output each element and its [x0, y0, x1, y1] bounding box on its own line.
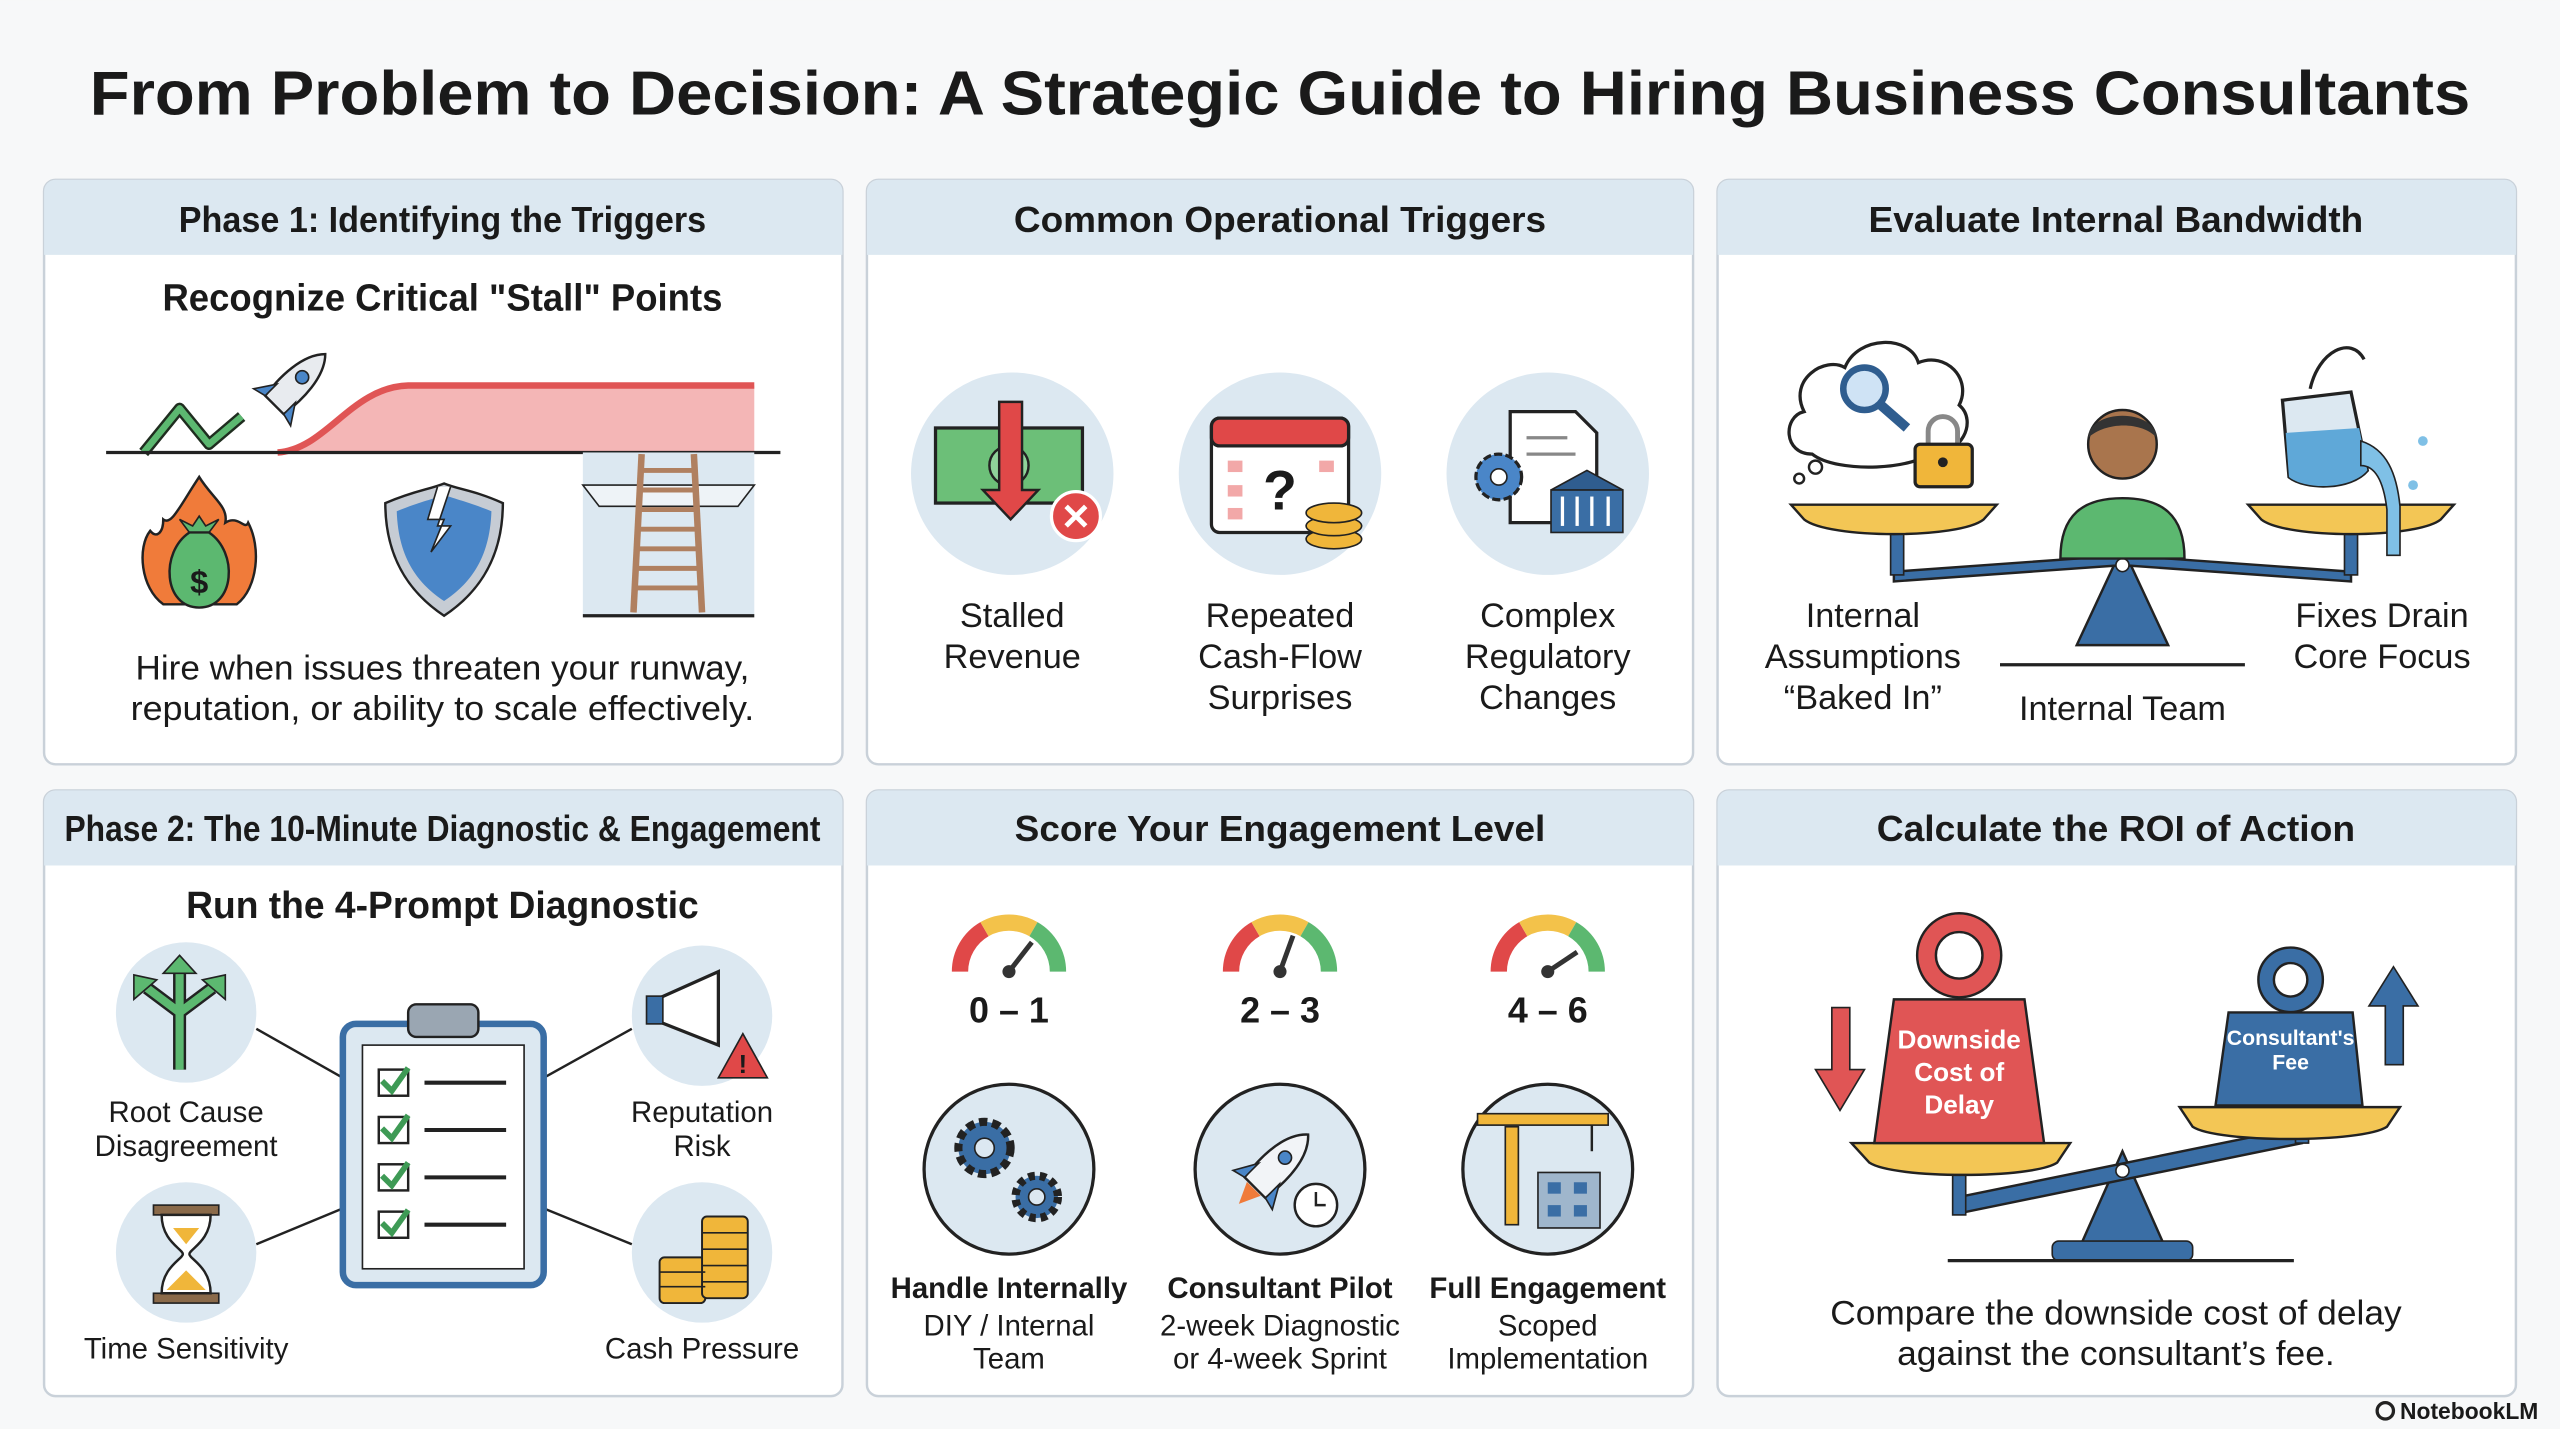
icon: cracked shield — [385, 483, 503, 616]
icon: burning money bag — [143, 477, 256, 608]
icon: draining pitcher — [2282, 348, 2428, 555]
text: compare — [1830, 1294, 2403, 1373]
icon: gears — [924, 1084, 1094, 1254]
panel: internal bandwidth — [1718, 180, 2516, 764]
icon: burning money bag: $ — [190, 563, 208, 600]
icon: blue weight consultant fee: Consultant's — [2227, 1027, 2354, 1050]
icon: thought cloud with magnifier and lock — [1789, 342, 1972, 487]
label: cash-flow surprises: Repeated — [1206, 597, 1354, 635]
text: hire when — [131, 649, 754, 728]
label: handle internally: Team — [973, 1342, 1045, 1375]
icon: bridge gap with ladder — [583, 452, 754, 616]
text: hire when: reputation, or ability to scale effectively. — [131, 690, 754, 728]
label: consultant pilot: or 4-week Sprint — [1173, 1342, 1387, 1375]
label: stalled revenue — [944, 597, 1081, 676]
panel: common operational triggers — [867, 180, 1693, 764]
label: reputation risk — [631, 1096, 773, 1163]
icon: clipboard checklist — [343, 1004, 544, 1285]
footer: notebooklm: NotebookLM — [2400, 1398, 2538, 1424]
arrow: down red — [1816, 1008, 1864, 1110]
subheading: stall points: Recognize Critical "Stall" Points — [162, 276, 722, 318]
label: internal assumptions — [1765, 597, 1961, 717]
icon: stalled revenue — [911, 372, 1113, 575]
label: internal assumptions: Assumptions — [1765, 638, 1961, 676]
label: root cause: Disagreement — [95, 1130, 278, 1163]
icon: megaphone reputation — [632, 946, 772, 1086]
connectors — [256, 1029, 632, 1244]
heading: bandwidth: Evaluate Internal Bandwidth — [1869, 199, 2363, 240]
icon: crane building — [1463, 1084, 1633, 1254]
panel: phase 1 triggers — [44, 180, 842, 764]
label: consultant pilot — [1160, 1272, 1400, 1375]
label: stalled revenue: Stalled — [960, 597, 1065, 635]
arrow: up blue — [2369, 967, 2418, 1065]
label: regulatory changes: Changes — [1479, 679, 1616, 717]
gauge: 4-6 — [1499, 923, 1597, 1030]
label: consultant pilot: Consultant Pilot — [1167, 1272, 1393, 1305]
heading: engagement: Score Your Engagement Level — [1015, 808, 1545, 849]
icon: coin stacks — [632, 1182, 772, 1323]
panel: phase 2 diagnostic — [44, 790, 842, 1396]
label: reputation risk: Reputation — [631, 1096, 773, 1129]
label: cash pressure: Cash Pressure — [605, 1333, 799, 1366]
icon: regulatory changes — [1447, 372, 1649, 575]
icon: red weight downside cost: Downside — [1898, 1024, 2021, 1054]
icon: megaphone reputation: ! — [739, 1049, 747, 1079]
icon: red weight downside cost: Cost of — [1914, 1057, 2004, 1087]
label: cash-flow surprises: Cash-Flow — [1198, 638, 1362, 676]
icon: rocket pilot — [1195, 1084, 1365, 1254]
text: compare: against the consultant’s fee. — [1897, 1335, 2335, 1373]
chart: growth then stall — [106, 336, 780, 452]
gauge: 2-3: 2 – 3 — [1240, 989, 1320, 1030]
label: internal team: Internal Team — [2019, 690, 2226, 728]
gauge: 0-1: 0 – 1 — [969, 989, 1049, 1030]
icon: balance scale with person — [1791, 410, 2454, 645]
label: full engagement: Full Engagement — [1429, 1272, 1666, 1305]
icon: cash flow calendar: ? — [1263, 460, 1297, 522]
heading: phase 2: Phase 2: The 10-Minute Diagnostic & Engagement — [64, 808, 820, 849]
label: full engagement — [1429, 1272, 1666, 1375]
icon: root cause arrows — [116, 942, 256, 1083]
label: fixes drain: Fixes Drain — [2295, 597, 2469, 635]
label: fixes drain — [2293, 597, 2471, 676]
text: compare: Compare the downside cost of delay — [1830, 1294, 2403, 1332]
label: handle internally — [891, 1272, 1128, 1375]
gauge: 4-6: 4 – 6 — [1508, 989, 1588, 1030]
label: handle internally: Handle Internally — [891, 1272, 1128, 1305]
label: consultant pilot: 2-week Diagnostic — [1160, 1310, 1400, 1343]
heading: operational triggers: Common Operational Triggers — [1014, 199, 1546, 240]
label: regulatory changes: Regulatory — [1465, 638, 1631, 676]
label: full engagement: Implementation — [1447, 1342, 1648, 1375]
subheading: 4-prompt diagnostic: Run the 4-Prompt Diagnostic — [186, 884, 699, 926]
icon: red weight downside cost — [1874, 923, 2044, 1143]
label: internal assumptions: “Baked In” — [1784, 679, 1942, 717]
label: stalled revenue: Revenue — [944, 638, 1081, 676]
label: reputation risk: Risk — [673, 1130, 731, 1163]
icon: blue weight consultant fee — [2216, 955, 2362, 1106]
label: full engagement: Scoped — [1498, 1310, 1598, 1343]
icon: blue weight consultant fee: Fee — [2272, 1052, 2309, 1075]
title: From Problem to Decision: A Strategic Guide to Hiring Business Consultants — [90, 60, 2470, 128]
label: cash-flow surprises: Surprises — [1208, 679, 1352, 717]
label: internal assumptions: Internal — [1806, 597, 1920, 635]
label: root cause — [95, 1096, 278, 1163]
panel: roi of action — [1718, 790, 2516, 1396]
icon: red weight downside cost: Delay — [1924, 1090, 1994, 1120]
icon: cash flow calendar — [1179, 372, 1381, 575]
panel: engagement level — [867, 790, 1693, 1396]
text: hire when: Hire when issues threaten your runway, — [136, 649, 749, 687]
icon: stalled revenue: $ — [1002, 453, 1017, 483]
heading: roi: Calculate the ROI of Action — [1877, 808, 2355, 849]
gauge: 0-1 — [960, 923, 1058, 1030]
label: fixes drain: Core Focus — [2293, 638, 2471, 676]
heading: phase 1: Phase 1: Identifying the Triggers — [179, 199, 706, 240]
label: regulatory changes — [1465, 597, 1631, 717]
icon: hourglass — [116, 1182, 256, 1323]
label: cash-flow surprises — [1198, 597, 1362, 717]
chart: roi balance scale — [1851, 1107, 2400, 1261]
label: time sensitivity: Time Sensitivity — [84, 1333, 289, 1366]
label: root cause: Root Cause — [109, 1096, 264, 1129]
gauge: 2-3 — [1231, 923, 1329, 1030]
label: regulatory changes: Complex — [1480, 597, 1615, 635]
label: handle internally: DIY / Internal — [924, 1310, 1094, 1343]
